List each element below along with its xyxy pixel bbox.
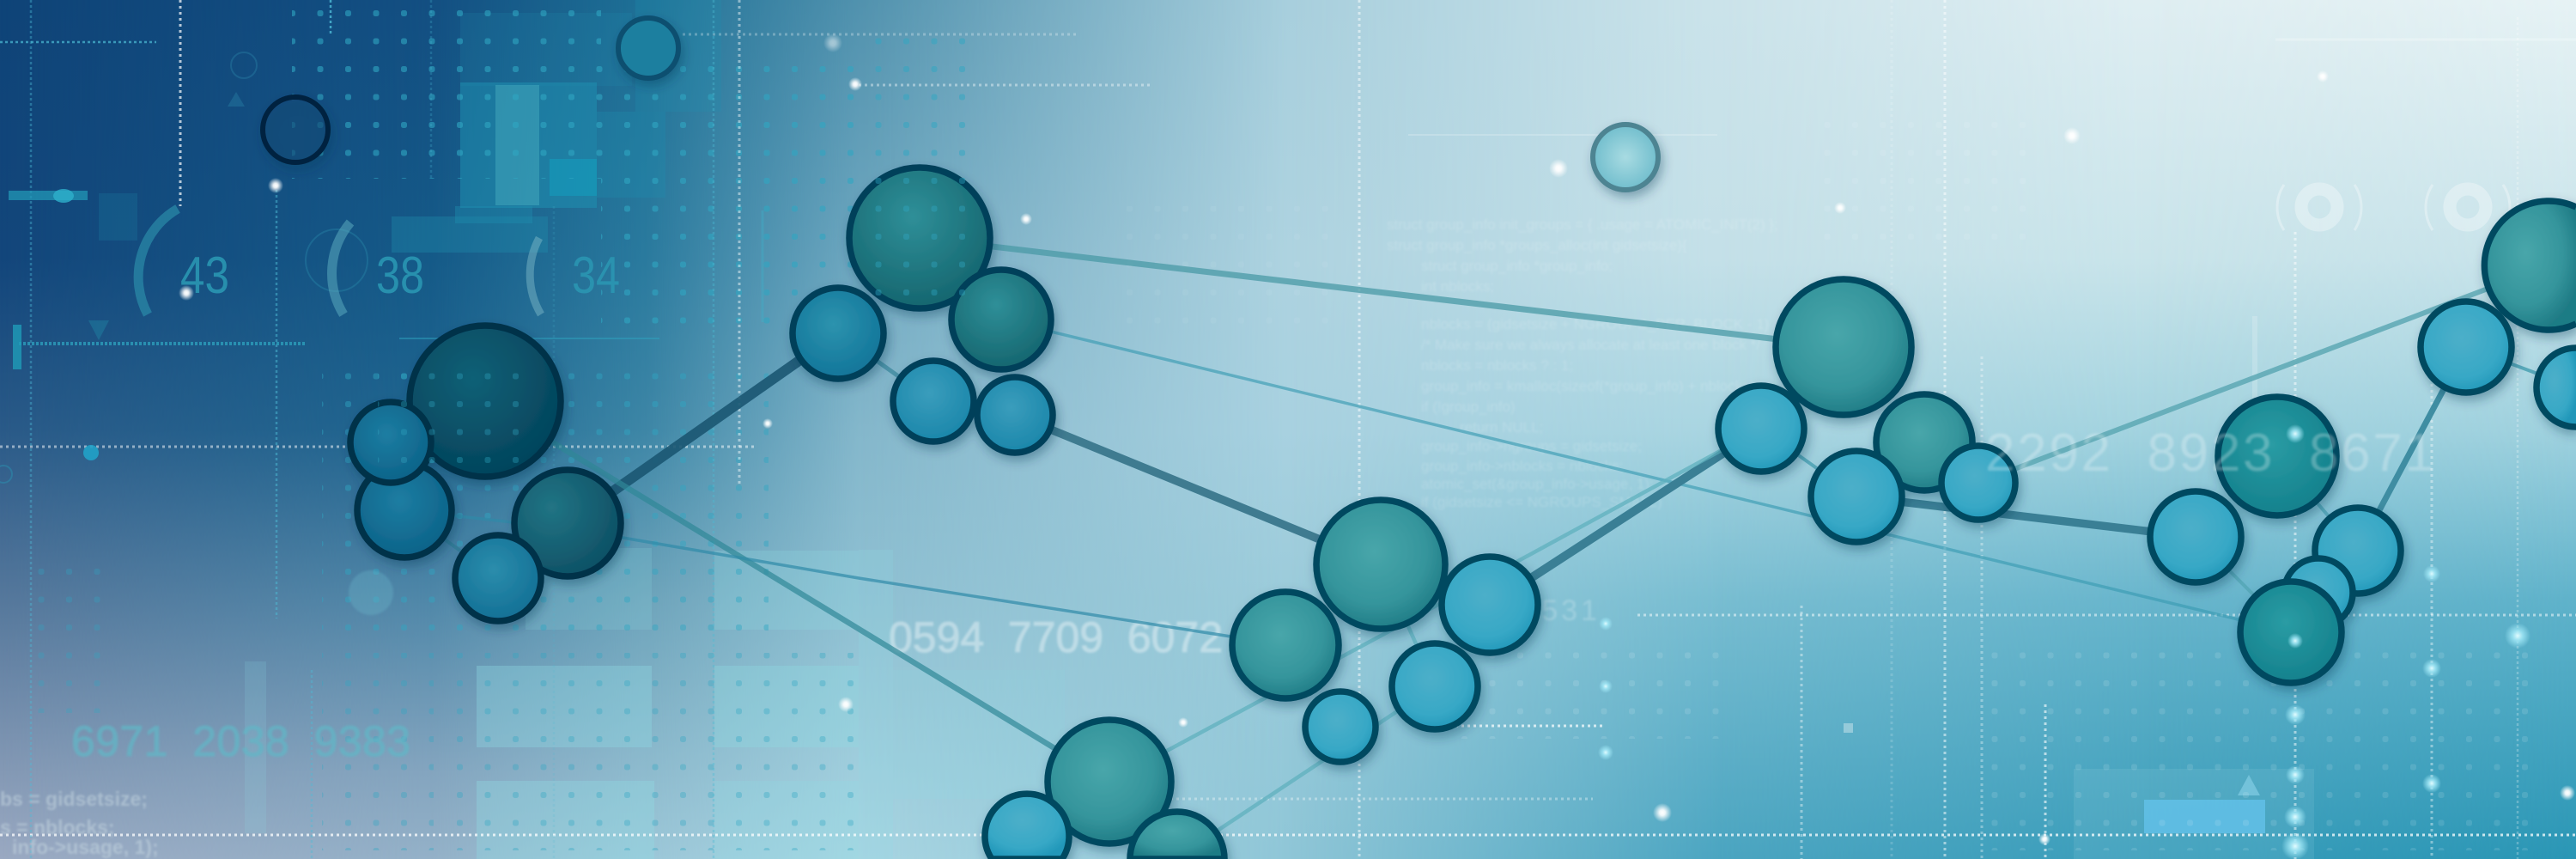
code text centre: group_info->nblocks = nblocks; — [1421, 458, 1623, 474]
code text centre: struct group_info *group_info; — [1421, 258, 1613, 274]
lone light sphere — [1593, 125, 1658, 190]
code text left: info->usage, 1); — [12, 836, 159, 858]
number row centre: 0594 7709 6072 — [889, 613, 1223, 661]
cluster 2 — [793, 168, 1053, 453]
code text centre: nblocks = (gidsetsize + NGROUPS_PER_BLOCK - 1) / NGROUPS; — [1421, 316, 1859, 332]
top teal connector — [920, 238, 1844, 347]
long teal connector lower — [485, 401, 1109, 782]
code text centre — [1387, 216, 1859, 510]
cluster 1 — [350, 326, 621, 621]
gauge 38: 38 — [376, 247, 424, 304]
lone sphere top — [618, 18, 678, 78]
lone outlined circle — [263, 97, 328, 162]
code text centre: if (!group_info) — [1421, 399, 1516, 415]
thick connector left — [568, 333, 838, 523]
cluster 3 — [1232, 500, 1538, 762]
number row left: 6971 2038 9383 — [71, 717, 410, 765]
code text centre: struct group_info init_groups = { .usage = ATOMIC_INIT(2) }; — [1387, 216, 1778, 233]
teal connector right — [1978, 265, 2549, 483]
pixel blocks lower centre — [245, 548, 1065, 859]
code text centre: group_info = kmalloc(sizeof(*group_info) + nblocks); — [1421, 378, 1759, 394]
cluster 4 — [985, 720, 1224, 859]
code text centre: struct group_info *groups_alloc(int gidsetsize){ — [1387, 237, 1687, 253]
code text centre: atomic_set(&group_info->usage, 1); — [1421, 476, 1654, 492]
cluster 7 — [2421, 201, 2576, 427]
cluster 5 — [1718, 279, 2015, 542]
gauge 38 — [332, 222, 424, 314]
number row right: 2292 8923 8671 — [1985, 423, 2434, 483]
thick connector centre — [1015, 415, 1381, 564]
icon: target rings top right — [2277, 185, 2510, 230]
thick connector centre right — [1490, 429, 1761, 605]
code text centre: return NULL; — [1460, 419, 1543, 436]
overlay dots on spheres — [378, 163, 979, 472]
number row faint: 4467 531 — [1451, 594, 1597, 627]
gauge 43: 43 — [180, 247, 229, 304]
thin teal links centre — [1109, 429, 1761, 857]
pixel blocks top left — [99, 0, 721, 253]
code text centre: /* Make sure we always allocate at least one block */ — [1421, 337, 1760, 353]
gauge 34 — [530, 238, 620, 314]
cluster 6 — [2150, 397, 2401, 683]
code text centre: int nblocks; — [1421, 278, 1494, 295]
thin links right — [1761, 347, 2567, 632]
thin connector upper — [1001, 320, 2291, 632]
thin connector left — [404, 510, 1285, 645]
code text centre: nblocks = nblocks ? : 1; — [1421, 357, 1573, 374]
code text centre: if (gidsetsize <= NGROUPS_SMALL) — [1421, 494, 1662, 510]
small link centre — [838, 333, 933, 401]
link far right — [2358, 347, 2466, 551]
HUD markers left — [0, 52, 393, 615]
code text centre: group_info->ngroups = gidsetsize; — [1421, 438, 1642, 454]
code text left: s = nblocks; — [0, 816, 115, 838]
connector lines — [404, 238, 2567, 857]
code text left: bs = gidsetsize; — [0, 788, 148, 810]
gauge 34: 34 — [572, 247, 620, 304]
code text left — [0, 788, 159, 858]
small link left — [404, 510, 498, 578]
thick connector right — [1856, 497, 2196, 537]
gauge 43 — [138, 209, 229, 314]
pixel blocks bottom right — [2074, 769, 2314, 859]
